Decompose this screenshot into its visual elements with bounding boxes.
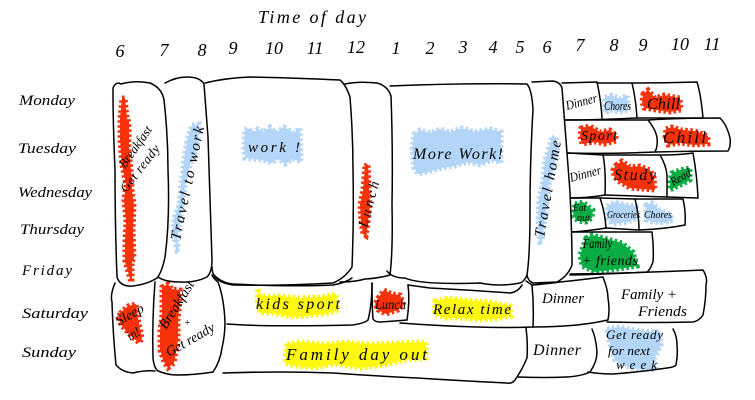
box: travel home (527, 81, 572, 283)
box: dinner Wednesday (568, 153, 605, 198)
hand-drawn schedule boxes (111, 77, 730, 383)
highlight: chores Monday (605, 95, 628, 113)
text: travel to work: Travel to work (168, 125, 208, 242)
hour axis labels: 7 (160, 40, 170, 60)
highlight: chill Monday (642, 90, 681, 112)
box: get ready next week (588, 329, 677, 374)
text: groceries: Groceries (607, 209, 640, 221)
highlight: lunch Saturday (375, 290, 404, 314)
box: chores Monday (597, 83, 637, 118)
highlight: eat out (573, 202, 593, 222)
day axis labels: Friday (21, 263, 72, 279)
hour axis labels: 7 (576, 35, 586, 55)
text: chill Monday: Chill (647, 96, 681, 113)
day axis labels: Monday (18, 93, 75, 109)
text: family day out: Family day out (285, 345, 428, 364)
box: family and friends Saturday (570, 270, 707, 322)
text: eat out: Eat (572, 203, 586, 214)
text: dinner Wednesday: Dinner (567, 162, 603, 185)
text: family and friends Friday: + friends (582, 254, 639, 269)
text: dinner Monday: Dinner (563, 90, 599, 113)
text: work: work ! (248, 140, 300, 156)
box: breakfast weekday (113, 82, 169, 286)
day axis labels: Thursday (20, 222, 84, 238)
text: breakfast get ready: Get ready (117, 141, 163, 195)
hour axis labels: 11 (704, 34, 720, 54)
box: travel to work (158, 77, 212, 282)
hour axis labels: 3 (458, 37, 468, 57)
box: dinner Sunday (518, 329, 597, 378)
text: get ready for next week: Get ready (606, 327, 663, 342)
hour axis labels: 2 (426, 38, 434, 58)
text: breakfast and get ready weekend (157, 277, 218, 360)
text: relax time: Relax time (432, 302, 511, 318)
highlight: read (670, 168, 690, 190)
highlight: more work (412, 128, 501, 174)
box: eat out (570, 198, 606, 232)
hour axis labels: 12 (347, 37, 365, 57)
text: breakfast get ready: Breakfast (115, 122, 155, 171)
hour axis labels: 8 (610, 35, 618, 55)
text: breakfast and get ready weekend: + (184, 318, 191, 329)
box: lunch weekday (340, 82, 392, 282)
text: sleep in: in! (124, 325, 143, 344)
text: breakfast and get ready weekend: Breakfast (157, 277, 199, 332)
text: dinner Sunday: Dinner (532, 342, 582, 359)
box: relax time (400, 281, 533, 328)
highlight: travel to work (173, 124, 199, 250)
box: dinner Monday (562, 82, 637, 120)
box: chill Monday (632, 82, 703, 118)
hour axis labels: 10 (671, 34, 689, 54)
box: study (603, 155, 667, 197)
highlight colours (118, 90, 708, 370)
box: work (205, 77, 353, 285)
box: kids sport (214, 275, 372, 326)
highlight: lunch weekday (360, 164, 370, 236)
box: family and friends Friday (570, 232, 653, 275)
text: dinner Saturday: Dinner (541, 291, 584, 307)
activity labels (114, 90, 706, 372)
hour axis labels: 11 (307, 38, 323, 58)
text: get ready for next week: week (616, 357, 657, 372)
box: dinner Saturday (532, 277, 609, 327)
text: sleep in: Sleep (114, 301, 147, 329)
hour axis labels: 6 (116, 41, 124, 61)
box: breakfast weekend (153, 275, 225, 375)
text: chores Thursday: Chores (644, 209, 672, 221)
text: more work: More Work! (412, 146, 503, 163)
highlight: groceries (607, 202, 638, 224)
highlight: breakfast weekday (120, 98, 134, 279)
highlight: chores Thursday (646, 203, 673, 223)
text: kids sport: kids sport (256, 296, 341, 313)
highlight: get ready next week (607, 327, 661, 370)
day axis labels: Tuesday (18, 141, 76, 157)
hour axis labels: 4 (488, 37, 498, 57)
text: sleep in (114, 301, 147, 344)
text: chill Tuesday: Chill (663, 128, 706, 147)
highlight: sport Tuesday (580, 126, 616, 144)
highlight: relax time (434, 298, 511, 320)
hour axis labels: 10 (265, 38, 283, 58)
hour axis labels: 8 (198, 40, 206, 60)
text: family and friends Friday (582, 237, 639, 269)
day axis labels: Saturday (22, 306, 88, 322)
highlight: breakfast weekend (160, 284, 180, 368)
text: get ready for next week: for next (608, 343, 650, 358)
hour axis labels: 5 (516, 37, 524, 57)
box: groceries (600, 198, 639, 230)
box: sport Tuesday (565, 120, 657, 153)
text: get ready for next week (606, 327, 663, 372)
title: Time of day (258, 7, 366, 27)
text: breakfast and get ready weekend: Get ready (164, 320, 218, 360)
text: family and friends Saturday: Family + (620, 287, 677, 303)
text: family and friends Saturday: Friends (637, 304, 687, 320)
hour axis labels: 9 (638, 35, 648, 55)
highlight: travel home (538, 137, 557, 242)
text: read: Read (667, 165, 694, 189)
day axis labels: Sunday (22, 345, 76, 361)
box: family day out (223, 328, 527, 383)
hour axis labels (116, 34, 720, 61)
text: travel home: Travel home (532, 139, 565, 239)
text: family and friends Saturday (620, 287, 687, 320)
highlight: work (244, 127, 301, 164)
highlight: study (613, 161, 655, 190)
hour axis labels: 9 (228, 38, 238, 58)
highlight: kids sport (257, 289, 338, 317)
box: more work (387, 84, 533, 285)
highlight: family day out (285, 342, 426, 368)
box: chill Tuesday (648, 118, 730, 152)
text: lunch weekday: Lunch (356, 180, 383, 230)
text: eat out: out (577, 213, 590, 224)
highlight: chill Tuesday (665, 127, 708, 145)
box: lunch Saturday (372, 283, 409, 322)
day axis labels: Wednesday (18, 185, 92, 201)
text: family and friends Friday: Family (582, 237, 613, 252)
box: read (660, 153, 698, 198)
text: lunch Saturday: Lunch (374, 298, 406, 313)
text: chores Monday: Chores (604, 98, 631, 113)
text: eat out (572, 203, 590, 224)
box: chores Thursday (635, 199, 685, 230)
text: study: Study (614, 167, 657, 184)
box: sleep in (111, 283, 155, 373)
hour axis labels: 6 (542, 37, 552, 57)
day axis labels (18, 93, 92, 361)
highlight: sleep in (118, 304, 142, 343)
highlight: family and friends Friday (580, 235, 637, 272)
hour axis labels: 1 (392, 38, 400, 58)
text: sport Tuesday: Sport (581, 129, 618, 144)
